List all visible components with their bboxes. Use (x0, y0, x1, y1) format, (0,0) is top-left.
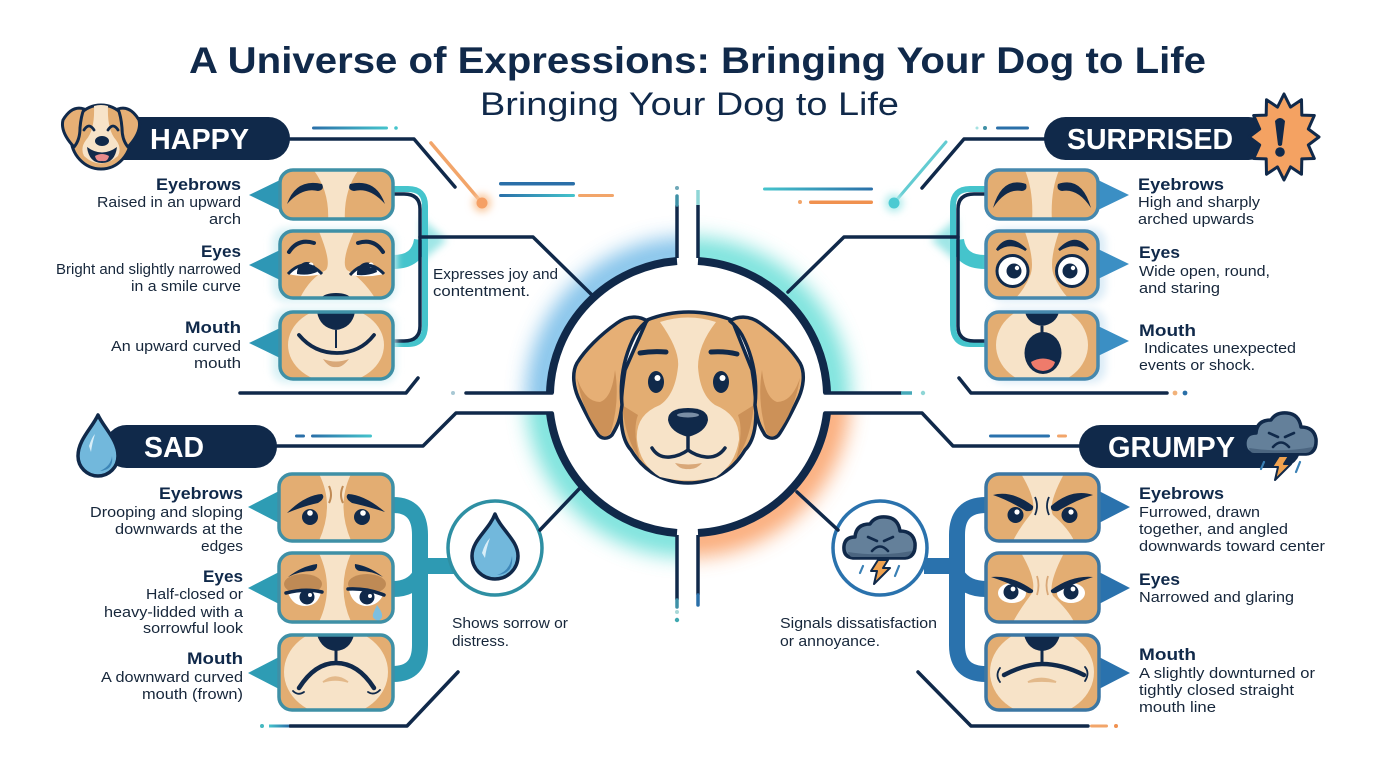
sad heading connector line (277, 413, 552, 446)
sad eyebrows panel: Eyebrows (159, 484, 243, 503)
grumpy eyebrows panel (984, 472, 1325, 555)
grumpy mouth panel: mouth line (1139, 700, 1216, 716)
grumpy pill heading: GRUMPY (1108, 432, 1235, 464)
panel: grumpy (780, 413, 1325, 728)
panel: surprised (763, 94, 1319, 395)
grumpy summary text (780, 616, 937, 650)
sad eyebrows panel (90, 472, 395, 555)
grumpy mouth panel (986, 628, 1315, 716)
grumpy eyebrows panel: downwards toward center (1139, 539, 1325, 555)
icon: sad water drop (78, 415, 118, 476)
surprised pill heading: SURPRISED (1067, 124, 1233, 156)
surprised bottom connector (825, 378, 1187, 395)
sad eyes panel (104, 551, 395, 637)
sad mouth panel: A downward curved (101, 670, 243, 686)
sad drop circle (448, 488, 580, 595)
sad eyebrows panel: edges (201, 539, 243, 555)
surprised eyes panel (984, 228, 1270, 302)
title: A Universe of Expressions: Bringing Your Dog to Life (189, 40, 1206, 81)
grumpy eyes panel (984, 551, 1294, 624)
happy mouth panel: An upward curved (111, 339, 241, 355)
happy eyes panel: Eyes (201, 242, 241, 261)
sad eyes panel: heavy-lidded with a (104, 605, 244, 621)
grumpy eyes panel: Narrowed and glaring (1139, 590, 1294, 606)
sad pill heading: SAD (144, 432, 204, 464)
happy eyebrows panel: arch (209, 212, 241, 228)
surprised mouth panel: Indicates unexpected (1144, 341, 1296, 357)
surprised decorative accents (763, 126, 1029, 212)
happy summary text: contentment. (433, 284, 530, 300)
surprised mouth panel (986, 305, 1296, 385)
sad eyes panel: Eyes (203, 567, 243, 586)
happy eyes panel: in a smile curve (131, 279, 241, 295)
sad mouth panel: Mouth (187, 649, 243, 668)
sad summary text: Shows sorrow or (452, 616, 568, 632)
happy pill heading: HAPPY (150, 124, 249, 156)
happy eyebrows panel: Raised in an upward (97, 195, 241, 211)
happy bottom connector (240, 378, 552, 395)
happy summary text (433, 267, 558, 300)
central hub: glowing ring (543, 186, 833, 622)
surprised mouth panel: events or shock. (1139, 358, 1255, 374)
grumpy storm circle (797, 492, 927, 595)
sad bracket connector (393, 505, 455, 674)
surprised eyebrows panel: Eyebrows (1138, 175, 1224, 194)
happy eyebrows panel (97, 168, 395, 228)
sad pill heading (105, 425, 277, 468)
happy eyes panel (56, 228, 396, 303)
grumpy mouth panel: tightly closed straight (1139, 683, 1294, 699)
happy decorative accents (312, 126, 614, 212)
panel: happy (56, 105, 614, 395)
icon: happy dog (62, 105, 140, 169)
surprised heading connector line (922, 139, 1046, 188)
happy mouth panel (111, 307, 396, 383)
sad eyebrows panel: Drooping and sloping (90, 505, 243, 521)
grumpy bracket connector (924, 505, 986, 674)
surprised eyes panel: Wide open, round, (1139, 264, 1270, 280)
grumpy summary text: Signals dissatisfaction (780, 616, 937, 632)
sad bottom connector (260, 672, 458, 728)
central dog face (574, 312, 803, 483)
happy heading connector line (290, 139, 455, 187)
grumpy eyebrows panel: together, and angled (1139, 522, 1288, 538)
grumpy eyebrows panel: Furrowed, drawn (1139, 505, 1260, 521)
surprised pill heading (1044, 117, 1270, 160)
grumpy eyes panel: Eyes (1139, 570, 1180, 589)
happy eyes panel: Bright and slightly narrowed (56, 262, 241, 278)
happy eyebrows panel: Eyebrows (156, 175, 241, 194)
panel: sad (78, 413, 580, 728)
happy pill heading (100, 117, 290, 160)
sad decorative accents (295, 434, 372, 438)
happy bracket connector (393, 189, 592, 344)
surprised bracket connector (788, 189, 985, 344)
grumpy mouth panel: A slightly downturned or (1139, 666, 1315, 682)
happy mouth panel: Mouth (185, 318, 241, 337)
icon: surprise burst (1249, 94, 1319, 180)
happy mouth panel: mouth (194, 356, 241, 372)
sad summary text (452, 616, 568, 650)
grumpy eyebrows panel: Eyebrows (1139, 484, 1224, 503)
grumpy summary text: or annoyance. (780, 634, 880, 650)
surprised mouth panel: Mouth (1139, 321, 1196, 340)
sad eyes panel: sorrowful look (143, 621, 244, 637)
grumpy mouth panel: Mouth (1139, 645, 1196, 664)
grumpy decorative accents (989, 434, 1067, 438)
sad eyes panel: Half-closed or (146, 587, 243, 603)
sad summary text: distress. (452, 634, 509, 650)
happy summary text: Expresses joy and (433, 267, 558, 283)
grumpy bottom connector (918, 672, 1118, 728)
surprised eyebrows panel: High and sharply (1138, 195, 1261, 211)
surprised eyebrows panel (984, 168, 1261, 228)
grumpy heading connector line (825, 413, 1079, 446)
surprised eyes panel: Eyes (1139, 243, 1180, 262)
surprised eyebrows panel: arched upwards (1138, 212, 1254, 228)
grumpy pill heading (1079, 425, 1301, 468)
surprised eyes panel: and staring (1139, 281, 1220, 297)
subtitle: Bringing Your Dog to Life (480, 86, 899, 122)
sad mouth panel (101, 628, 393, 716)
sad mouth panel: mouth (frown) (142, 687, 243, 703)
sad eyebrows panel: downwards at the (115, 522, 243, 538)
icon: storm cloud (1245, 413, 1316, 480)
